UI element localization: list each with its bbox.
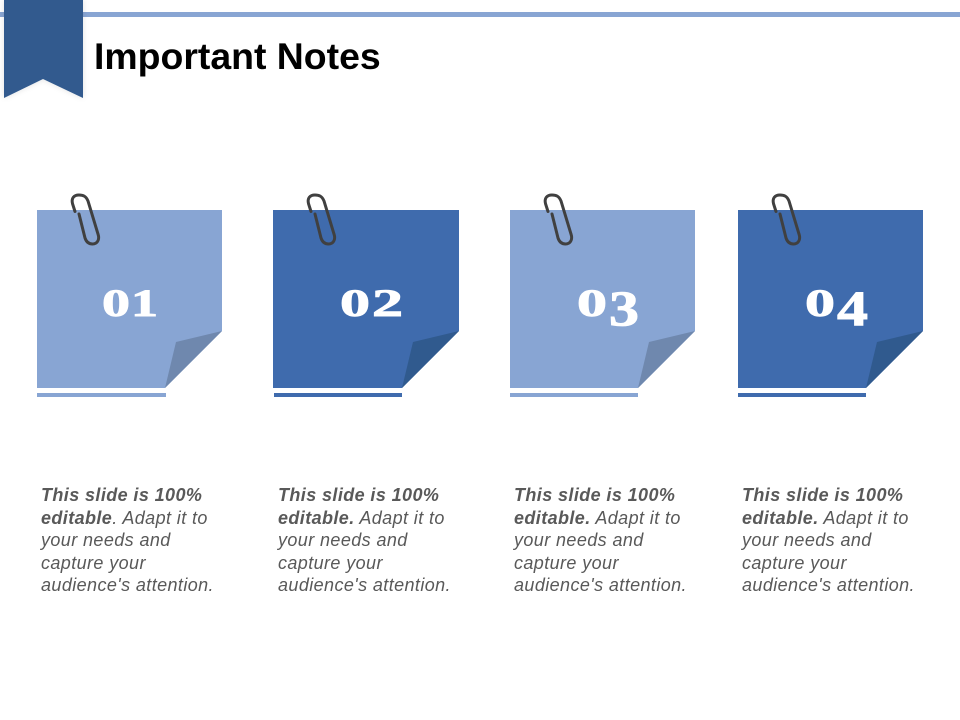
number 04: 0	[805, 282, 835, 325]
text block 3: capture your	[514, 552, 619, 572]
text block 1: editable. Adapt it to	[41, 508, 208, 528]
text block 2: editable. Adapt it to	[278, 508, 445, 528]
number 02: 2	[372, 282, 403, 325]
text block 1: your needs and	[41, 530, 171, 550]
number 04: 4	[837, 280, 868, 336]
text block 4: editable. Adapt it to	[742, 508, 909, 528]
text block 3: This slide is 100%	[514, 485, 675, 505]
note 1	[37, 210, 222, 397]
text block 4: This slide is 100%	[742, 485, 903, 505]
paperclip 4	[773, 195, 800, 244]
paperclip 3	[545, 195, 572, 244]
paperclip 2	[308, 195, 335, 244]
number 01: 0	[102, 282, 130, 325]
text block 2: This slide is 100%	[278, 485, 439, 505]
text block 4	[741, 485, 915, 595]
text block 4: capture your	[742, 552, 847, 572]
text block 3: your needs and	[514, 530, 644, 550]
ribbon bookmark	[4, 0, 83, 98]
text block 4: audience's attention.	[742, 575, 915, 595]
text block 2	[277, 485, 451, 595]
text block 2: capture your	[278, 552, 383, 572]
text block 2: your needs and	[278, 530, 408, 550]
text block 4: your needs and	[742, 530, 872, 550]
title: Important Notes	[94, 35, 381, 77]
number 02: 0	[340, 282, 370, 325]
text block 1: capture your	[41, 552, 146, 572]
number 03: 3	[609, 280, 639, 336]
text block 1: This slide is 100%	[41, 485, 202, 505]
text block 3: audience's attention.	[514, 575, 687, 595]
note 3	[510, 210, 695, 397]
paperclip 1	[72, 195, 99, 244]
text block 1: audience's attention.	[41, 575, 214, 595]
note 4	[738, 210, 923, 397]
text block 2: audience's attention.	[278, 575, 451, 595]
note 2	[273, 210, 459, 397]
number 01: 1	[131, 282, 158, 325]
text block 3	[513, 485, 687, 595]
text block 3: editable. Adapt it to	[514, 508, 681, 528]
number 03: 0	[577, 282, 607, 325]
text block 1	[40, 485, 214, 595]
